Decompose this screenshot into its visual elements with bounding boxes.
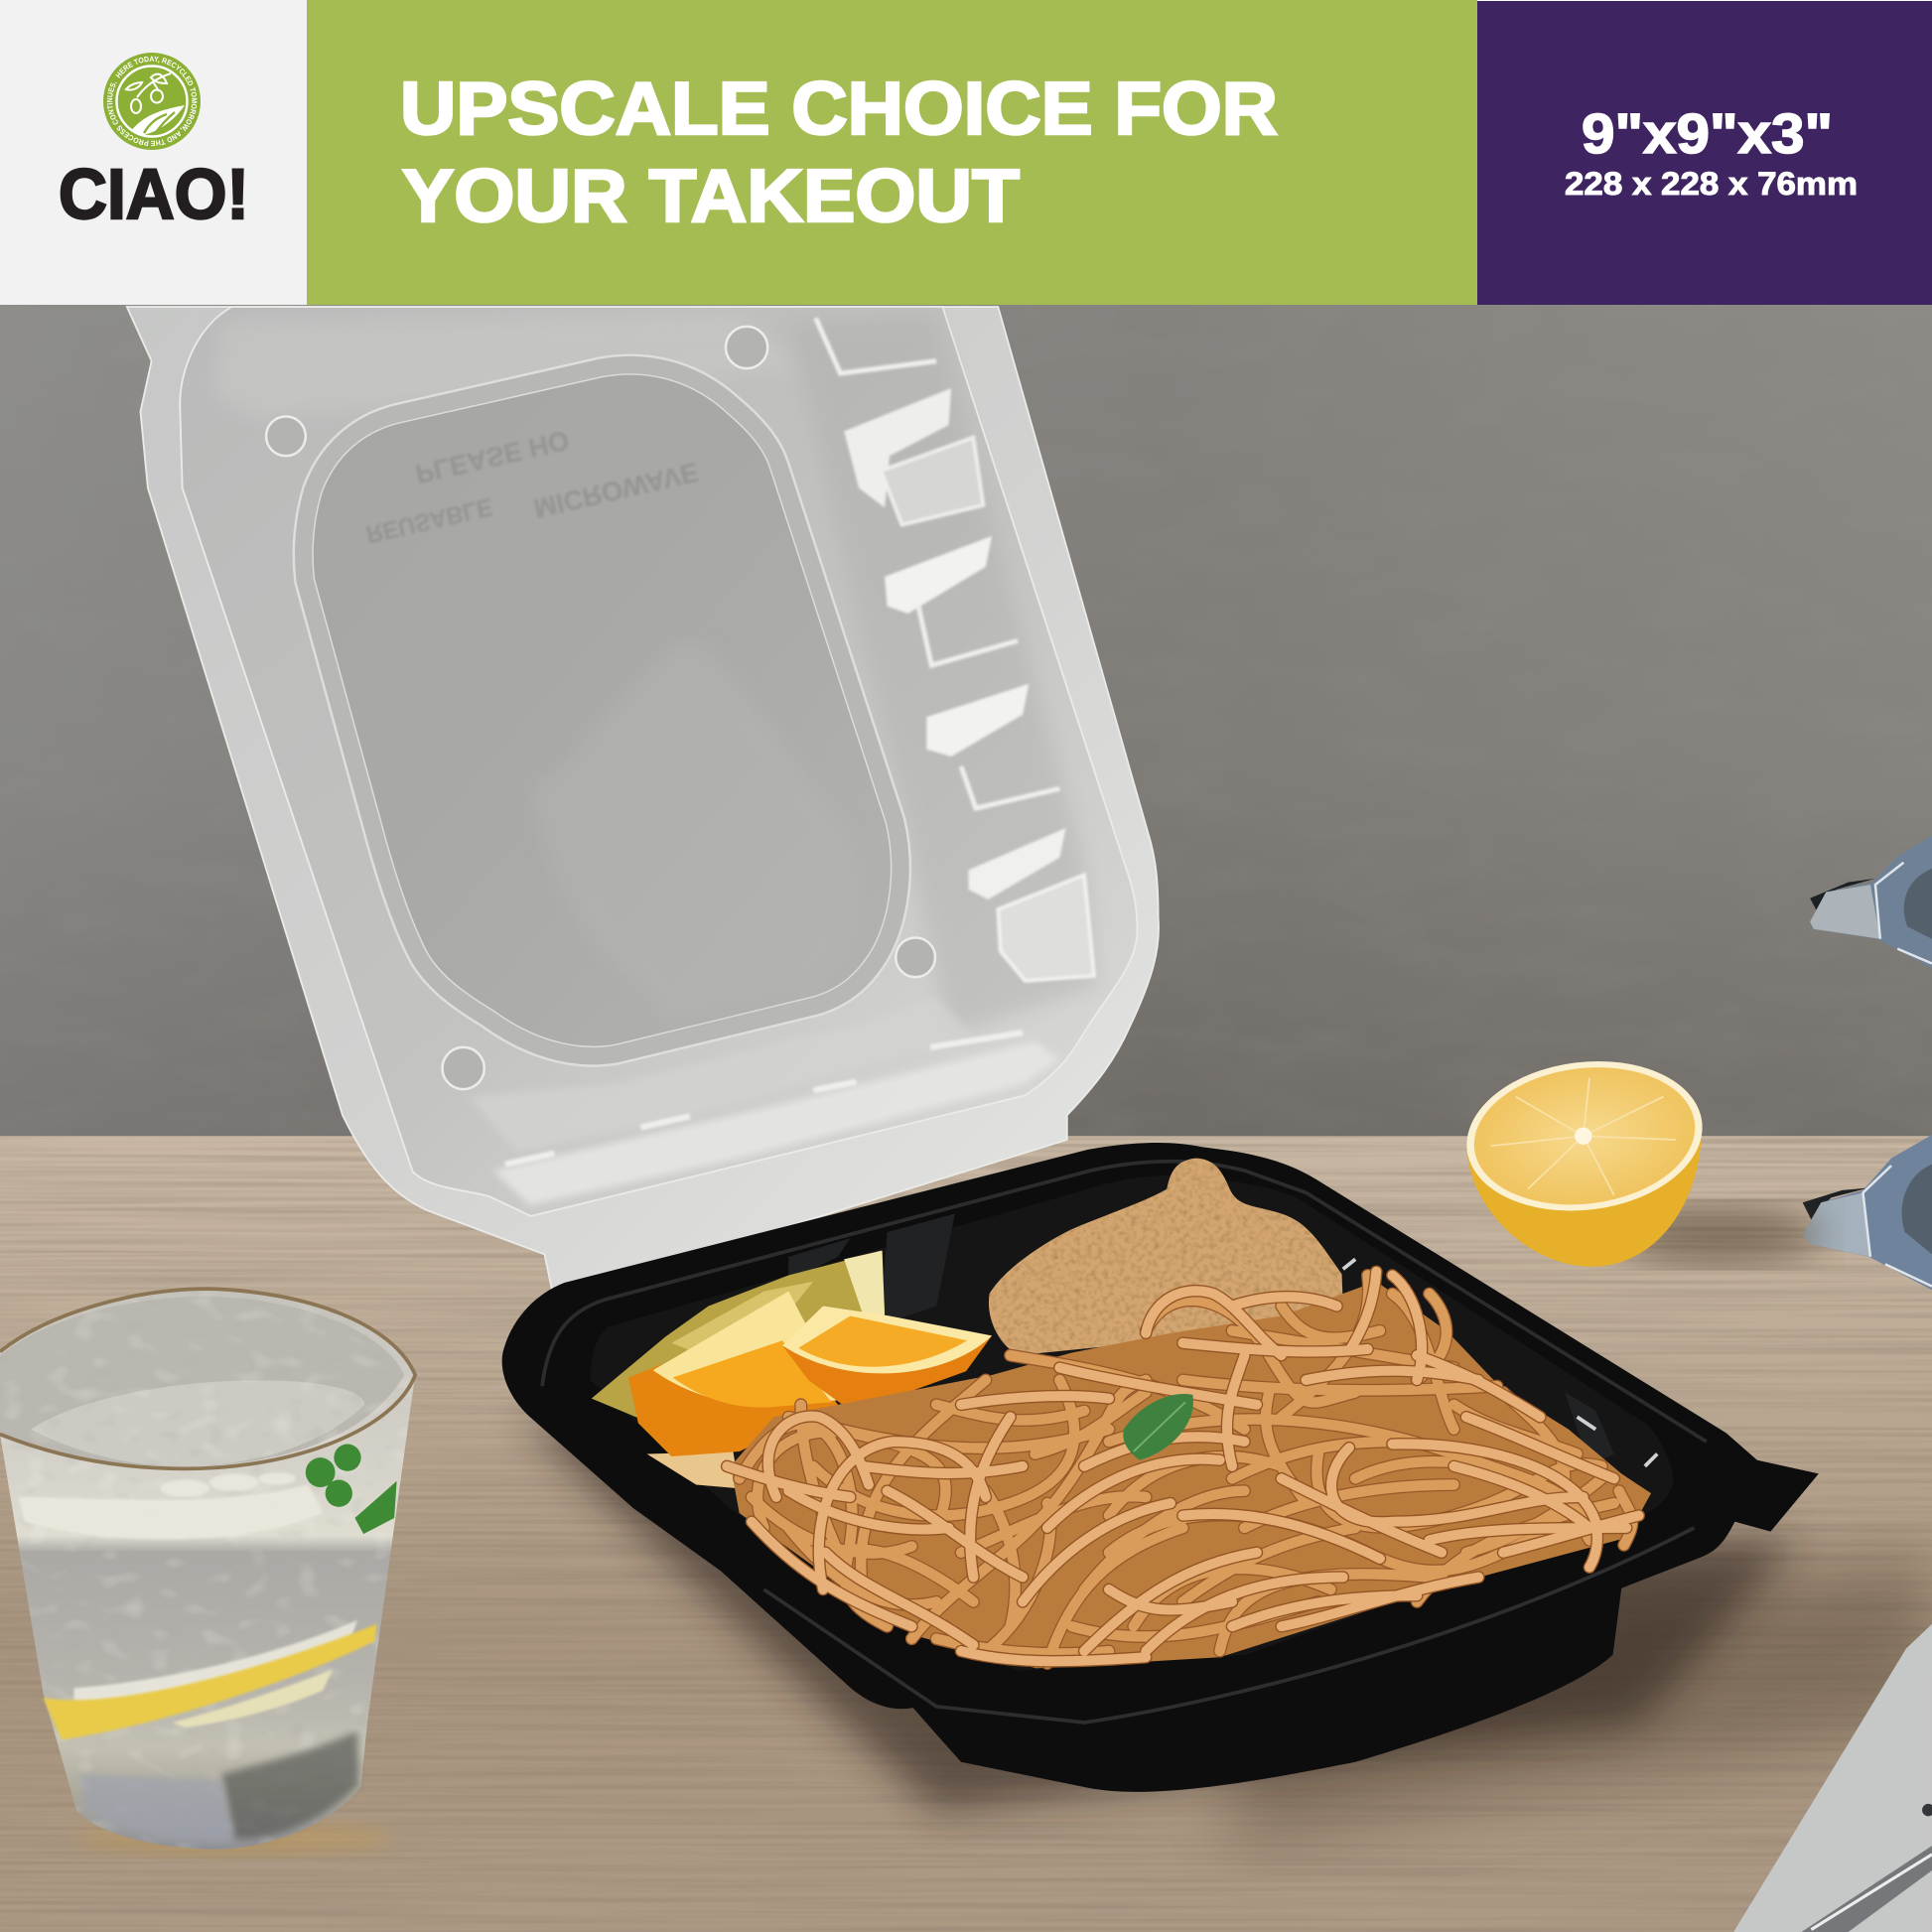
wooden table (0, 1136, 1932, 1932)
mint leaf (1123, 1394, 1193, 1460)
hammered glass with water (0, 1289, 415, 1856)
well ribs (788, 1213, 1614, 1466)
logo emblem: HERE TODAY, RECYCLED TOMORROW, AND THE PROCESS CONTINUES. (107, 56, 197, 147)
lid outer flange (127, 307, 1159, 1290)
gold rim (0, 1289, 415, 1468)
side lid lower right (1803, 1135, 1932, 1290)
lid inner shading (211, 314, 1097, 1205)
lid moulded ribs (505, 318, 1094, 1165)
glass body (0, 1289, 415, 1850)
lid inner tub (180, 307, 1138, 1216)
lemon slice in water (43, 1624, 377, 1739)
bright reflections (19, 1472, 357, 1703)
logo wordmark: CIAO! (59, 156, 249, 234)
wall background (0, 296, 1932, 1140)
headline: YOUR TAKEOUT (402, 154, 1020, 237)
lid centre panel (313, 374, 892, 1046)
hammered texture (0, 1289, 415, 1850)
pineapple garnish (592, 1251, 885, 1430)
side lid top right (1810, 835, 1932, 968)
size in inches: 9"x9"x3" (1582, 102, 1833, 166)
container well (590, 1175, 1673, 1671)
orange wedges (628, 1292, 992, 1488)
spaghetti (727, 1272, 1651, 1668)
embossed text on lid, seen through from behind: REUSABLE (363, 492, 494, 548)
embossed text on lid, seen through from behind (363, 425, 702, 548)
lid stacking dimples (266, 327, 935, 1089)
header: logo panel (0, 0, 307, 305)
headline (400, 67, 1278, 237)
embossed text on lid, seen through from behind: MICROWAVE (531, 457, 702, 524)
glass inner back wall and water (0, 1297, 404, 1466)
container body (502, 1143, 1819, 1792)
glass base refraction (221, 1731, 358, 1839)
clear open lid (127, 307, 1159, 1290)
napkin and fork (1733, 1624, 1932, 1932)
headline: UPSCALE CHOICE FOR (400, 67, 1278, 150)
mint in glass (306, 1445, 397, 1534)
header: headline panel (307, 0, 1477, 305)
black container (502, 1143, 1819, 1811)
lid centre panel ring (313, 374, 892, 1046)
size in millimetres: 228 x 228 x 76mm (1565, 166, 1858, 202)
lemon half (1458, 1048, 1824, 1267)
container inner lip highlight (542, 1162, 1707, 1442)
embossed text on lid, seen through from behind: PLEASE HO (413, 425, 572, 489)
fried chicken (989, 1159, 1343, 1355)
glass shadow (73, 1821, 394, 1856)
header: size panel (1477, 1, 1932, 305)
